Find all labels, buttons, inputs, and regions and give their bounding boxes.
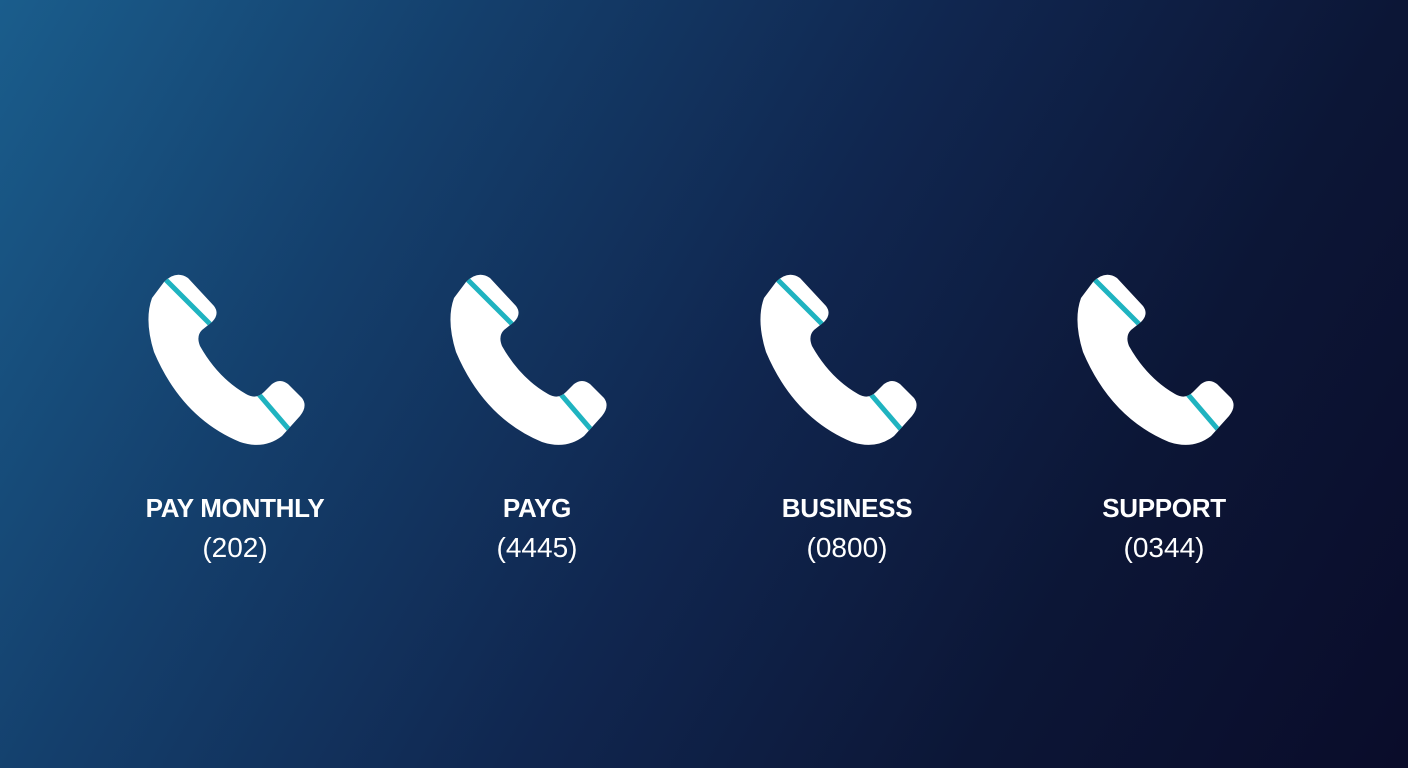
label: BUSINESS: [782, 493, 912, 523]
item: business: [760, 274, 917, 563]
label: PAYG: [503, 493, 571, 523]
item: support: [1077, 274, 1234, 563]
item: payg: [450, 274, 607, 563]
label: (0800): [807, 532, 887, 563]
label: (202): [202, 532, 268, 563]
icon: phone: [148, 274, 305, 445]
icon: phone: [450, 274, 607, 445]
label: (4445): [497, 532, 577, 563]
icon: phone: [1077, 274, 1234, 445]
icon: phone: [760, 274, 917, 445]
label: SUPPORT: [1102, 493, 1226, 523]
label: [1102, 493, 1226, 563]
label: PAY MONTHLY: [146, 493, 324, 523]
label: [146, 493, 324, 563]
label: [782, 493, 912, 563]
item: pay monthly: [146, 274, 324, 563]
label: [497, 493, 577, 563]
label: (0344): [1124, 532, 1204, 563]
